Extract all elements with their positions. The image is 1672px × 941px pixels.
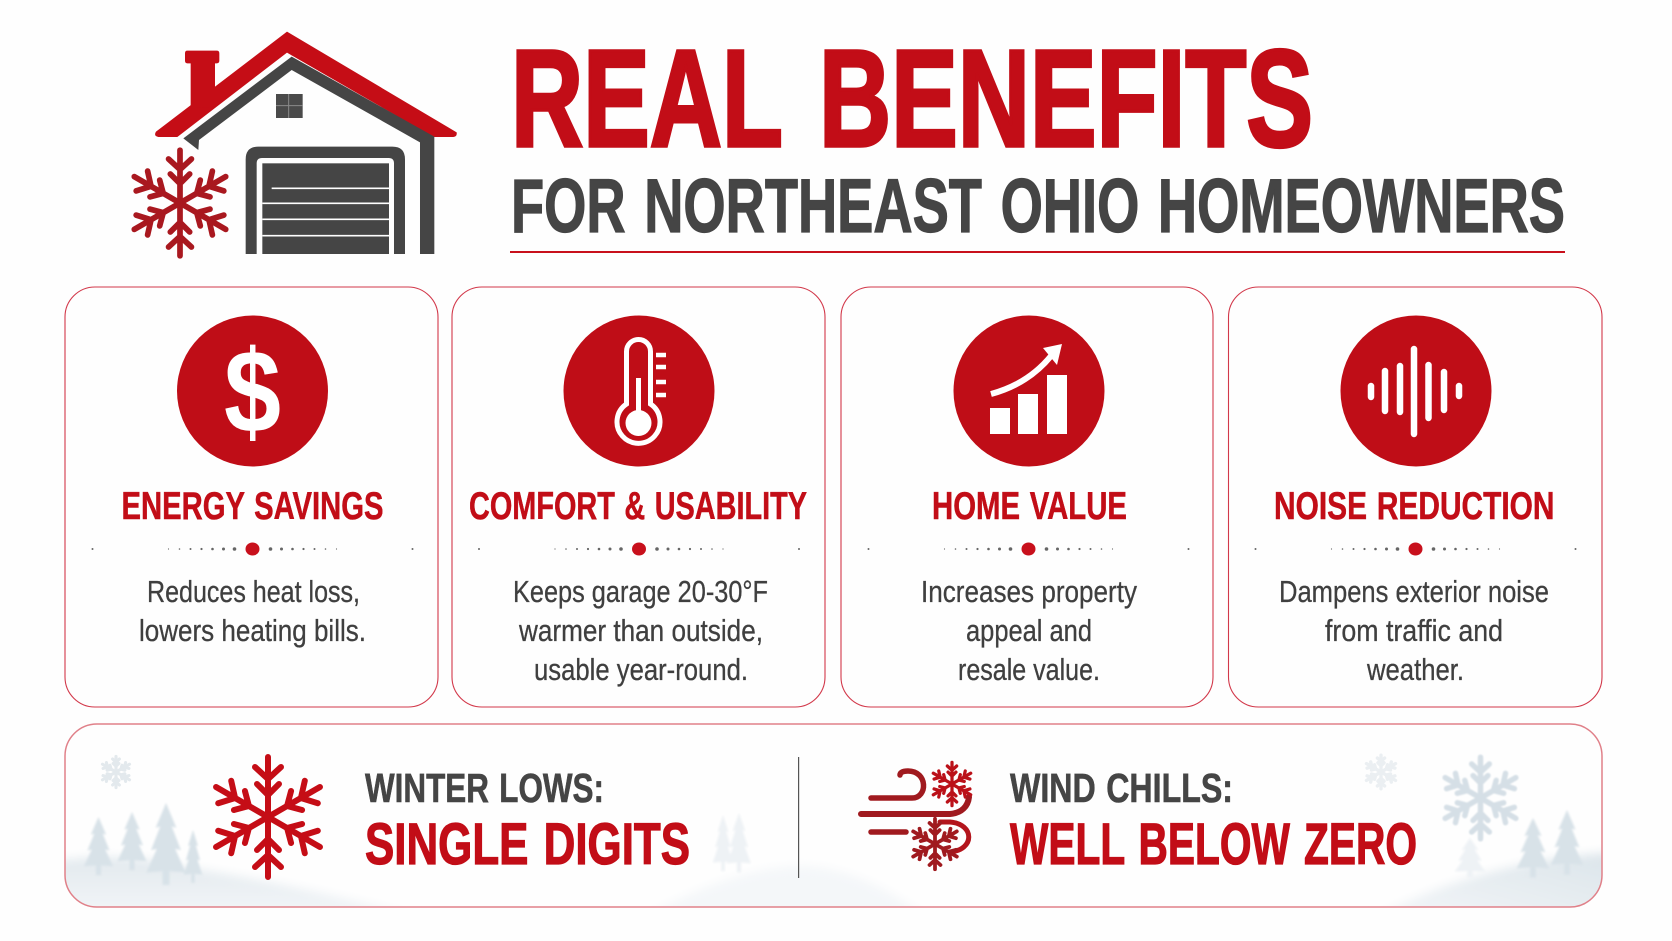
heading: energy savings: ENERGY SAVINGS — [122, 485, 384, 528]
icon: rising chart — [954, 316, 1104, 466]
text: noise description: from traffic and — [1325, 613, 1503, 648]
icon: winter snowflake — [210, 757, 326, 877]
icon: wind and snow — [861, 762, 973, 869]
panel: winter conditions — [50, 724, 1620, 920]
icon: house gable and wall — [183, 57, 434, 254]
text: comfort description: warmer than outside, — [518, 613, 763, 648]
heading: comfort and usability: COMFORT & USABILITY — [469, 485, 807, 528]
icon: garage door — [246, 147, 405, 254]
text: comfort description: Keeps garage 20-30°F — [513, 574, 768, 609]
label: winter lows: WINTER LOWS: — [365, 765, 604, 811]
icon: sound wave — [1340, 316, 1492, 466]
winter scenery — [50, 755, 1620, 920]
divider — [868, 542, 1190, 556]
icon: thermometer — [564, 316, 714, 466]
heading: home value: HOME VALUE — [932, 485, 1127, 528]
text: home value description — [921, 574, 1137, 687]
value: well below zero: WELL BELOW ZERO — [1010, 812, 1417, 877]
text: comfort description — [513, 574, 768, 687]
text: noise description: Dampens exterior noise — [1279, 574, 1549, 609]
icon: chimney — [185, 51, 219, 108]
value: single digits: SINGLE DIGITS — [365, 812, 690, 877]
text: comfort description: usable year-round. — [534, 652, 748, 687]
icon: dollar — [177, 316, 328, 466]
heading: noise reduction: NOISE REDUCTION — [1274, 485, 1554, 528]
text: home value description: appeal and — [966, 613, 1092, 648]
title: REAL BENEFITS — [511, 22, 1313, 176]
text: energy savings description: lowers heating bills. — [139, 613, 366, 648]
divider line — [798, 757, 799, 878]
text: home value description: Increases property — [921, 574, 1137, 609]
panel: energy savings — [65, 287, 438, 707]
icon: header snowflake — [129, 150, 231, 256]
label: wind chills: WIND CHILLS: — [1010, 765, 1233, 811]
panel: home value — [841, 287, 1213, 707]
text: noise description: weather. — [1366, 652, 1464, 687]
text: energy savings description: Reduces heat loss, — [147, 574, 360, 609]
text: noise description — [1279, 574, 1549, 687]
divider — [1254, 542, 1576, 556]
title underline — [510, 251, 1565, 253]
icon: garage house with snowflake — [129, 32, 457, 256]
icon: red roof — [155, 32, 457, 137]
divider — [92, 542, 414, 556]
divider — [478, 542, 800, 556]
panel: comfort and usability — [452, 287, 825, 707]
icon: gable window — [276, 94, 303, 118]
panel: noise reduction — [1228, 287, 1602, 707]
text: home value description: resale value. — [958, 652, 1100, 687]
icon: dollar: $ — [224, 326, 281, 458]
text: energy savings description — [139, 574, 366, 648]
